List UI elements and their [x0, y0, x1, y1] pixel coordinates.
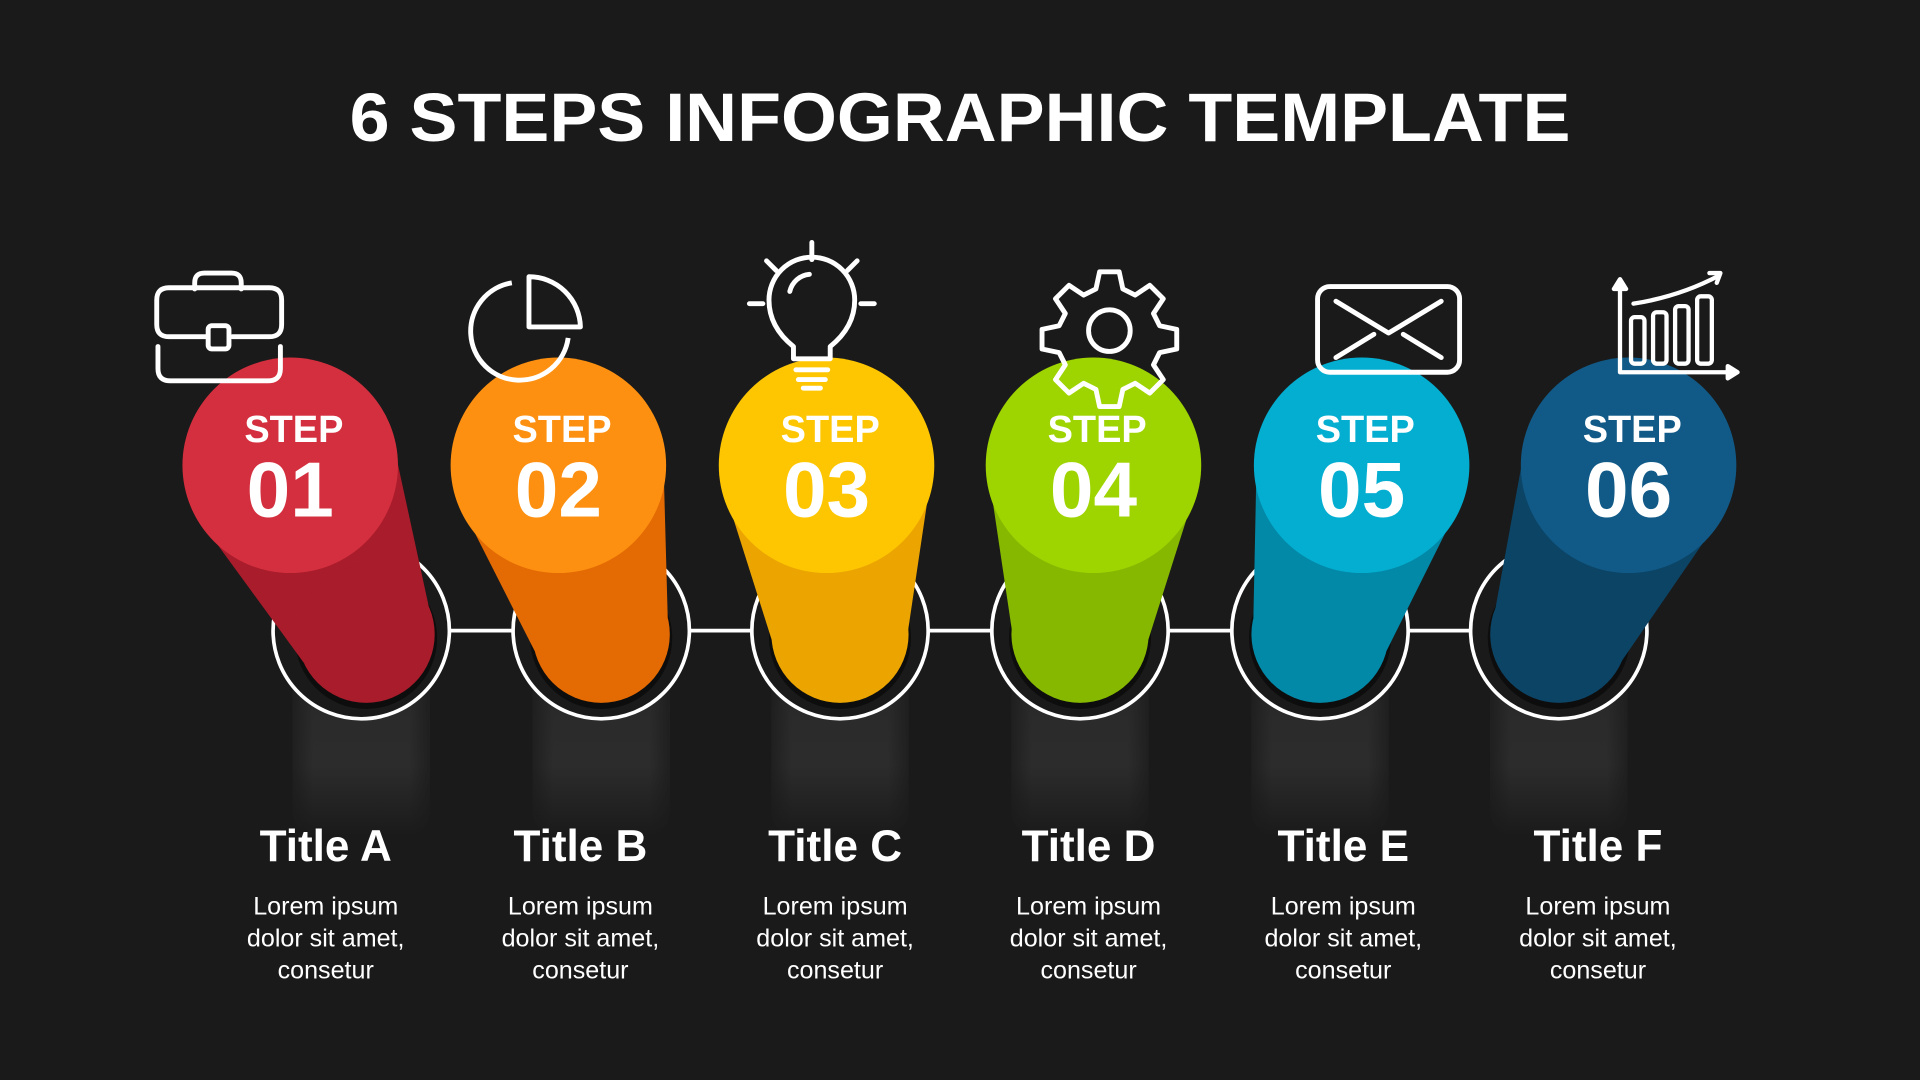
text: Title B: Lorem ipsum — [508, 893, 653, 921]
text: Title E: Lorem ipsum — [1271, 893, 1416, 921]
step 6 cylinder — [1488, 358, 1736, 709]
icon: envelope — [1318, 287, 1460, 372]
text: Title D: Title D — [1022, 822, 1156, 871]
text: Title D: Lorem ipsum — [1016, 893, 1161, 921]
step 2 cylinder: STEP — [512, 409, 612, 451]
text: Title F: Title F — [1533, 822, 1662, 871]
text: Title F: Lorem ipsum — [1525, 893, 1670, 921]
step texts — [247, 822, 1677, 984]
text: Title E: consetur — [1295, 956, 1391, 984]
icon: gear — [1042, 272, 1177, 407]
text: Title C: Title C — [768, 822, 902, 871]
text: Title B: consetur — [532, 956, 629, 984]
text: Title F — [1519, 822, 1677, 984]
text: Title E — [1264, 822, 1422, 984]
icon: light bulb — [749, 242, 874, 388]
connector line and rings — [273, 542, 1647, 719]
step 6 cylinder: 06 — [1585, 446, 1672, 534]
step 4 cylinder: STEP — [1048, 409, 1147, 451]
step 5 cylinder: 05 — [1318, 446, 1405, 534]
text: Title F: consetur — [1550, 956, 1646, 984]
step 2 cylinder — [451, 358, 672, 709]
text: Title A: dolor sit amet, — [247, 925, 405, 953]
icon: growth chart — [1614, 273, 1738, 378]
text: Title D: consetur — [1040, 956, 1137, 984]
text: Title E: Title E — [1278, 822, 1409, 871]
text: Title C: consetur — [787, 956, 883, 984]
step 1 cylinder: STEP — [244, 409, 343, 451]
step 4 cylinder — [986, 358, 1201, 709]
step 2 cylinder: 02 — [515, 446, 602, 534]
text: Title F: dolor sit amet, — [1519, 925, 1677, 953]
title: 6 STEPS INFOGRAPHIC TEMPLATE — [350, 79, 1570, 156]
step 6 cylinder: STEP — [1583, 409, 1682, 451]
text: Title C: dolor sit amet, — [756, 925, 914, 953]
text: Title E: dolor sit amet, — [1264, 925, 1422, 953]
icon: pie chart — [471, 277, 580, 380]
text: Title C — [756, 822, 914, 984]
step 3 cylinder — [719, 358, 934, 709]
step 1 cylinder — [182, 358, 437, 709]
shadow columns — [293, 634, 1627, 836]
text: Title A: consetur — [278, 956, 374, 984]
text: Title D: dolor sit amet, — [1010, 925, 1167, 953]
step 5 cylinder: STEP — [1316, 409, 1415, 451]
text: Title B — [502, 822, 659, 984]
step 1 cylinder: 01 — [247, 446, 334, 534]
text: Title D — [1010, 822, 1167, 984]
step 5 cylinder — [1249, 358, 1469, 709]
text: Title A — [247, 822, 405, 984]
icon: briefcase — [157, 273, 282, 381]
text: Title B: dolor sit amet, — [502, 925, 659, 953]
text: Title C: Lorem ipsum — [763, 893, 908, 921]
step 4 cylinder: 04 — [1050, 446, 1137, 534]
text: Title A: Title A — [260, 822, 392, 871]
text: Title A: Lorem ipsum — [253, 893, 398, 921]
step 3 cylinder: STEP — [781, 409, 880, 451]
step 3 cylinder: 03 — [783, 446, 870, 534]
text: Title B: Title B — [513, 822, 647, 871]
